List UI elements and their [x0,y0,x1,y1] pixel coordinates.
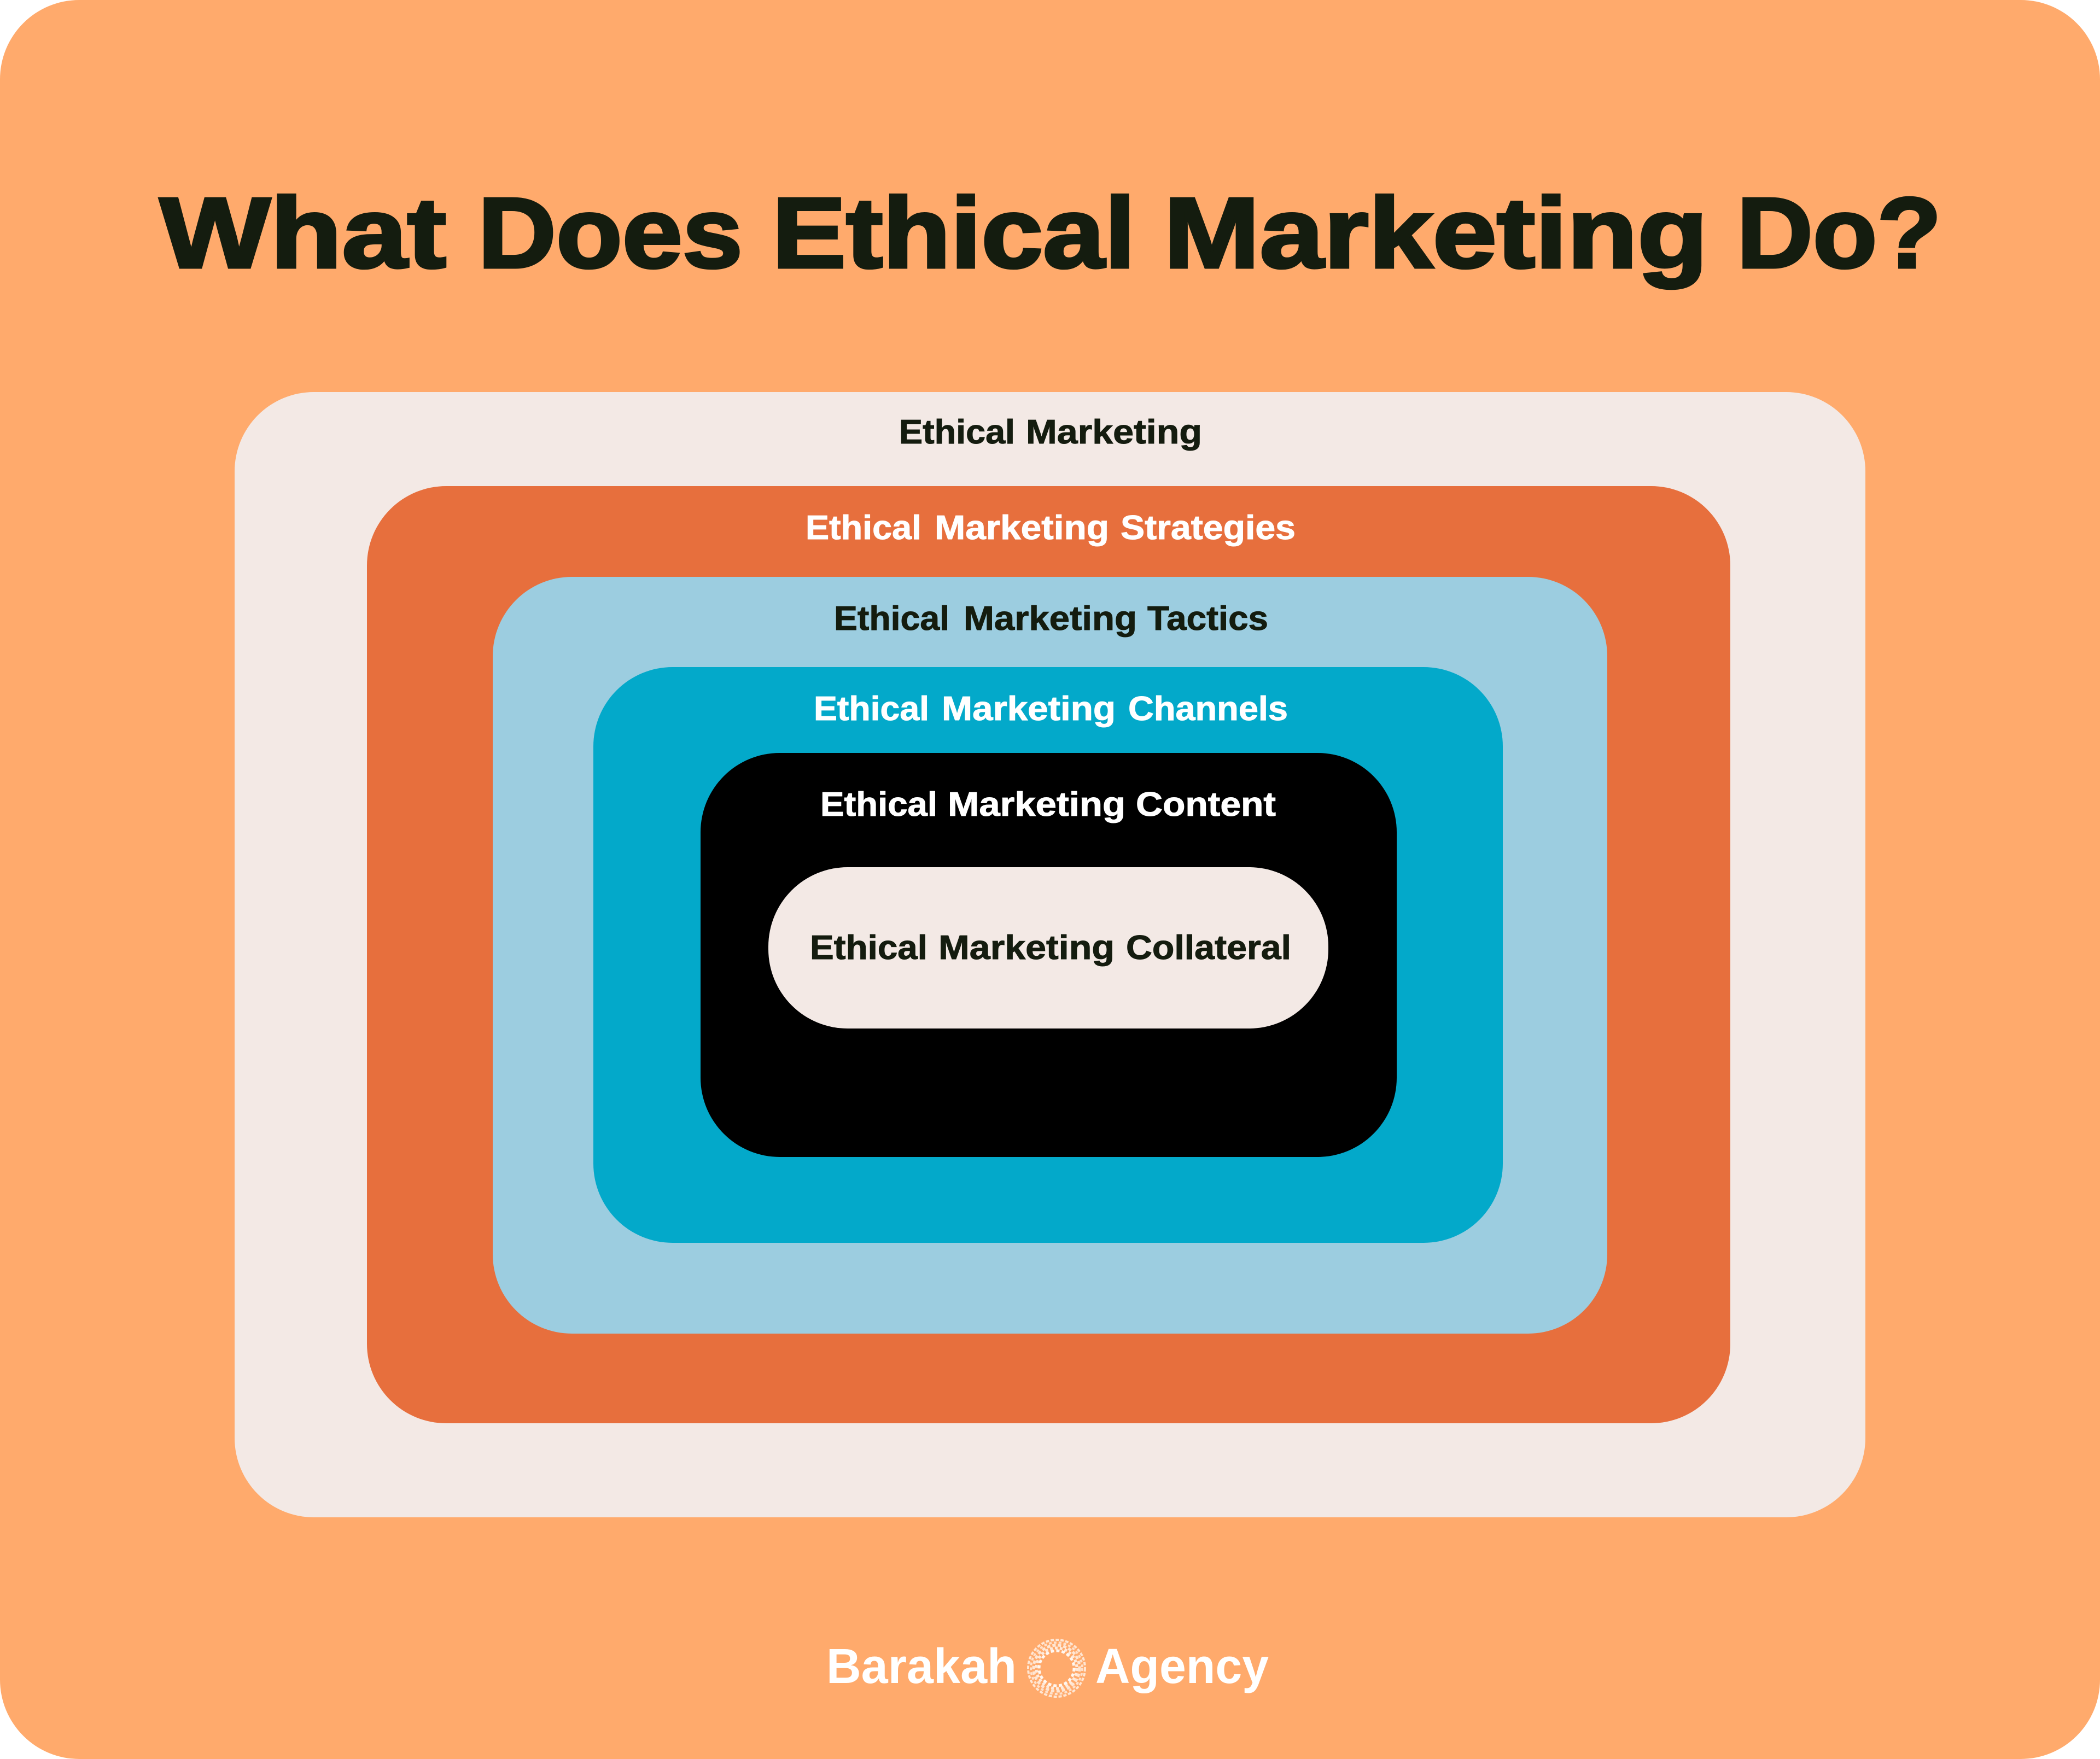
label: Ethical Marketing Channels [814,690,1288,728]
label: Ethical Marketing Content: Ethical [820,786,937,823]
label: Ethical Marketing Collateral: Marketing [938,929,1115,967]
label: Ethical Marketing Tactics: Marketing [964,600,1137,638]
logo wordmark: Barakah: Barakah [826,1639,1017,1694]
label: Ethical Marketing Strategies: Strategies [1121,509,1296,547]
layer: Ethical Marketing Channels [593,667,1503,1243]
label: Ethical Marketing Tactics: Tactics [1147,600,1268,638]
label: Ethical Marketing Content [820,786,1276,823]
title: Marketing [1164,177,1708,289]
label: Ethical Marketing Collateral [810,929,1291,967]
layer: Ethical Marketing Collateral [768,867,1328,1028]
label: Ethical Marketing Strategies [806,509,1296,547]
title: What [160,177,446,289]
label: Ethical Marketing Strategies: Ethical [806,509,921,547]
label: Ethical Marketing Channels: Marketing [942,690,1116,728]
label: Ethical Marketing Content: Content [1136,786,1276,823]
label: Ethical Marketing [899,413,1202,451]
title: Ethical [772,177,1135,289]
logo wordmark: Agency: Agency [1095,1639,1269,1694]
label: Ethical Marketing Collateral: Collateral [1126,929,1291,967]
title: Do? [1737,177,1941,289]
layer: Ethical Marketing [235,392,1865,1517]
label: Ethical Marketing Collateral: Ethical [810,929,928,967]
label: Ethical Marketing Channels: Channels [1128,690,1288,728]
title [160,177,1941,289]
layer: Ethical Marketing Content [701,753,1397,1157]
nested diagram [235,392,1865,1517]
label: Ethical Marketing: Ethical [899,413,1015,451]
title: Does [478,177,743,289]
label: Ethical Marketing Tactics [834,600,1268,638]
icon: dotted ring [1028,1640,1085,1697]
label: Ethical Marketing Tactics: Ethical [834,600,949,638]
label: Ethical Marketing Content: Marketing [948,786,1125,823]
logo: Barakah Agency [826,1639,1269,1697]
layer: Ethical Marketing Tactics [493,577,1607,1334]
label: Ethical Marketing Channels: Ethical [814,690,929,728]
layer: Ethical Marketing Strategies [367,486,1730,1423]
label: Ethical Marketing Strategies: Marketing [935,509,1109,547]
label: Ethical Marketing: Marketing [1026,413,1202,451]
